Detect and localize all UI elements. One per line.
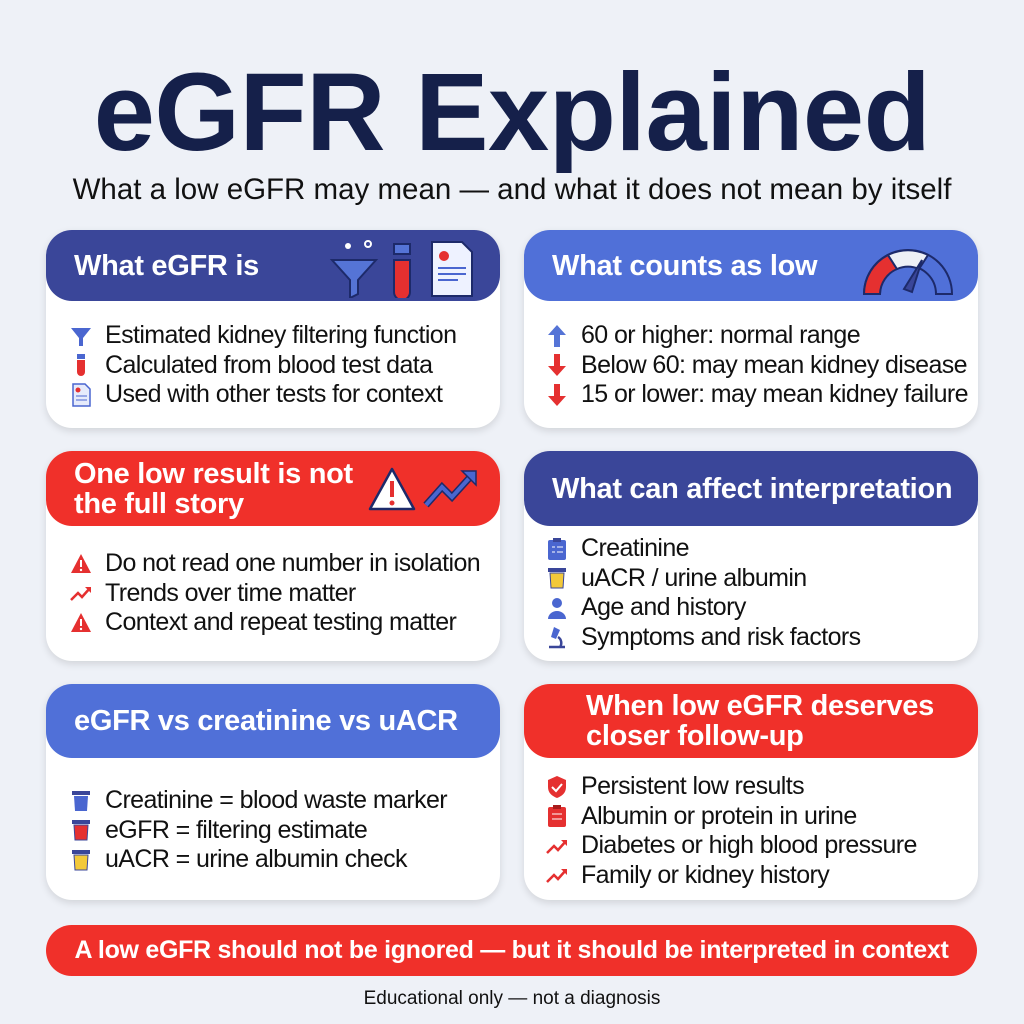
list: thresholds: Below 60: may mean kidney disease bbox=[581, 351, 967, 379]
title: eGFR Explained bbox=[94, 51, 930, 174]
list: follow-up triggers bbox=[546, 772, 917, 889]
list: follow-up triggers: Family or kidney history bbox=[581, 861, 829, 889]
list: context points bbox=[70, 549, 480, 636]
footer note: Educational only — not a diagnosis bbox=[364, 988, 660, 1009]
list: follow-up triggers: Albumin or protein in urine bbox=[581, 802, 857, 830]
header: comparison: eGFR vs creatinine vs uACR bbox=[74, 705, 458, 737]
list: follow-up triggers: Persistent low results bbox=[581, 772, 804, 800]
list: context points: Do not read one number in isolation bbox=[105, 549, 480, 577]
list: factors: Creatinine bbox=[581, 534, 689, 562]
panel: what counts as low bbox=[524, 230, 978, 428]
header: what counts as low: What counts as low bbox=[552, 250, 817, 282]
panel: one low result bbox=[46, 451, 500, 661]
list: thresholds bbox=[548, 321, 968, 408]
icons: warning and trend bbox=[368, 468, 477, 510]
header: what eGFR is: What eGFR is bbox=[74, 250, 259, 282]
list: what eGFR is: Used with other tests for context bbox=[105, 380, 442, 408]
panel: what can affect interpretation bbox=[524, 451, 978, 661]
header: what can affect interpretation: What can affect interpretation bbox=[552, 472, 952, 504]
list: what eGFR is: Estimated kidney filtering function bbox=[105, 321, 456, 349]
icons: funnel tube report bbox=[330, 240, 473, 298]
icon: gauge bbox=[863, 249, 953, 295]
list: comparison: uACR = urine albumin check bbox=[105, 845, 407, 873]
bottom banner bbox=[46, 925, 977, 976]
header: what can affect interpretation bbox=[524, 451, 978, 526]
list: comparison: eGFR = filtering estimate bbox=[105, 816, 367, 844]
list: factors bbox=[548, 534, 861, 651]
list: factors: Symptoms and risk factors bbox=[581, 623, 861, 651]
list: context points: Context and repeat testing matter bbox=[105, 608, 456, 636]
header: comparison bbox=[46, 684, 500, 758]
list: what eGFR is: Calculated from blood test data bbox=[105, 351, 432, 379]
panel: when low eGFR deserves follow-up bbox=[524, 684, 978, 900]
list: comparison bbox=[72, 786, 448, 873]
header: what eGFR is bbox=[46, 230, 500, 301]
panel: what eGFR is bbox=[46, 230, 500, 428]
list: what eGFR is bbox=[71, 321, 456, 408]
subtitle: What a low eGFR may mean — and what it does not mean by itself bbox=[73, 173, 951, 206]
header: what counts as low bbox=[524, 230, 978, 301]
list: factors: uACR / urine albumin bbox=[581, 564, 807, 592]
header: one low result: One low result is not bbox=[74, 458, 353, 490]
list: context points: Trends over time matter bbox=[105, 579, 356, 607]
list: thresholds: 60 or higher: normal range bbox=[581, 321, 860, 349]
panel: eGFR vs creatinine vs uACR bbox=[46, 684, 500, 900]
header: follow-up: When low eGFR deserves bbox=[586, 690, 934, 722]
list: follow-up triggers: Diabetes or high blood pressure bbox=[581, 831, 917, 859]
list: thresholds: 15 or lower: may mean kidney failure bbox=[581, 380, 968, 408]
header: follow-up: closer follow-up bbox=[586, 720, 804, 752]
header: follow-up bbox=[524, 684, 978, 758]
header: one low result: the full story bbox=[74, 488, 244, 520]
bottom banner: A low eGFR should not be ignored — but it should be interpreted in context bbox=[74, 936, 949, 964]
header: one low result bbox=[46, 451, 500, 526]
list: factors: Age and history bbox=[581, 593, 746, 621]
list: comparison: Creatinine = blood waste marker bbox=[105, 786, 447, 814]
